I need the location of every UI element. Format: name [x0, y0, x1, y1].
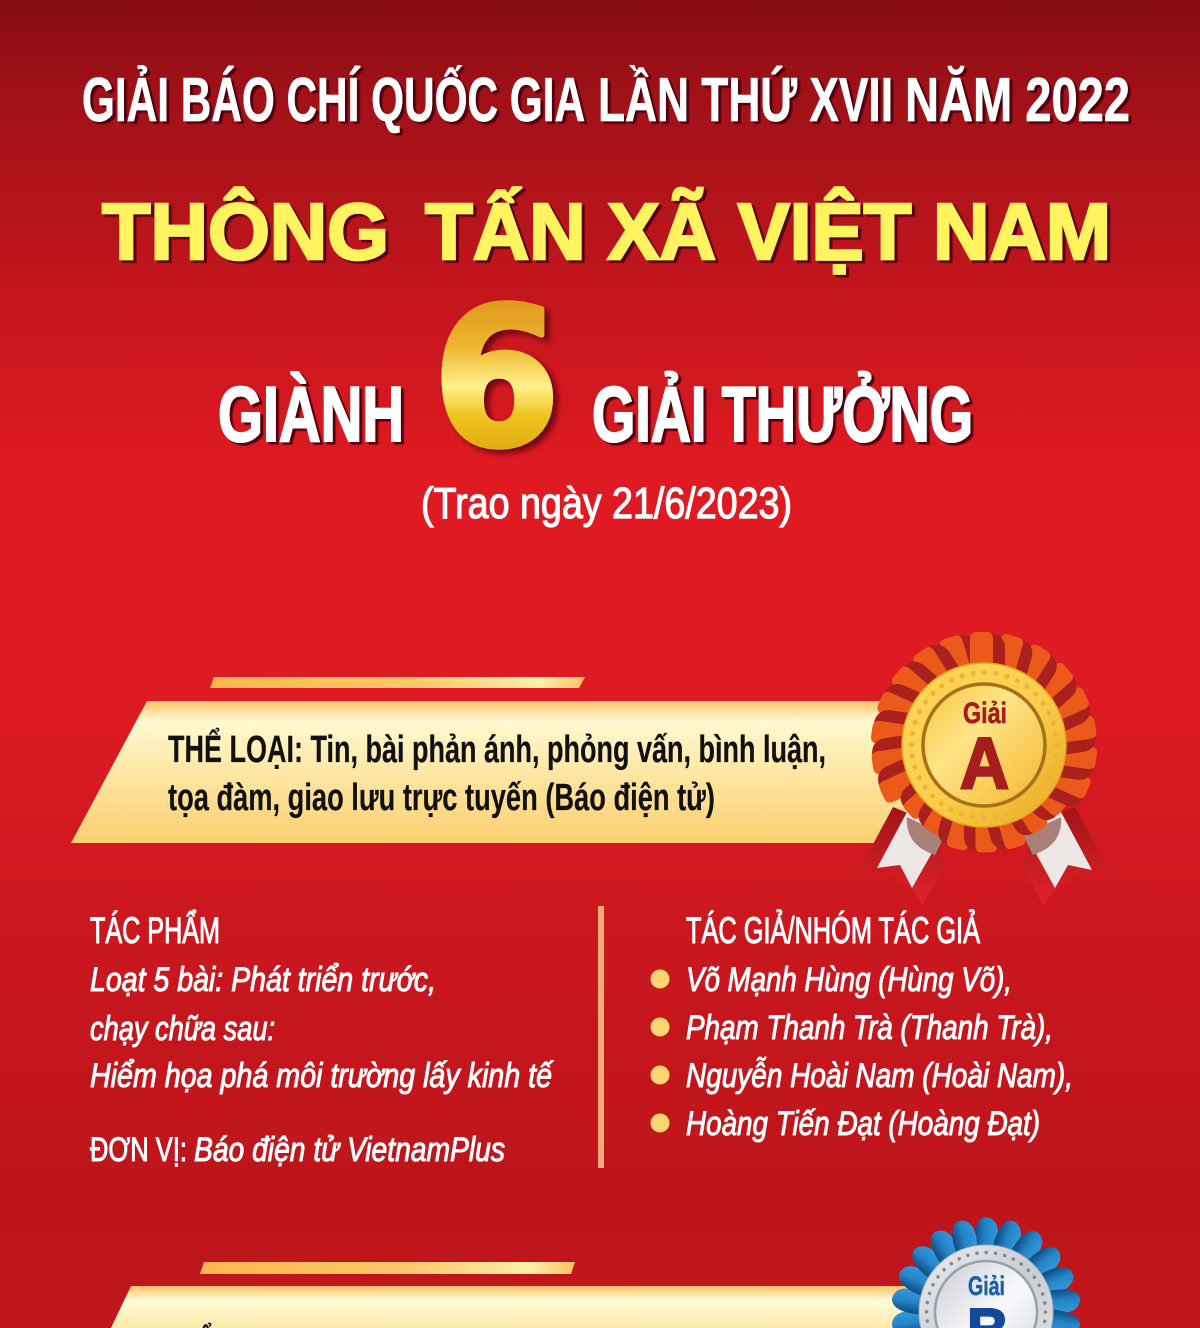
heading: organisation: THÔNG — [102, 187, 389, 276]
icon: silver medal B — [890, 1217, 1082, 1328]
accent bar A — [210, 677, 585, 688]
author list — [650, 961, 1073, 1143]
text block: work — [90, 909, 554, 1169]
panel: prize B — [111, 1217, 1082, 1328]
category text A: tọa đàm, giao lưu trực tuyến (Báo điện tử) — [168, 777, 715, 819]
text block: work: Loạt 5 bài: Phát triển trước, — [90, 961, 436, 999]
icon: silver medal B: Giải — [968, 1271, 1005, 1301]
title: award name: NĂM 2022 — [905, 66, 1130, 135]
text block: work: chạy chữa sau: — [90, 1010, 275, 1048]
icon: gold medal A: A — [960, 724, 1009, 804]
text block: work: TÁC PHẨM — [90, 909, 220, 951]
panel: prize A — [71, 631, 1110, 1169]
author list: Phạm Thanh Trà (Thanh Trà), — [686, 1009, 1053, 1047]
author list: Hoàng Tiến Đạt (Hoàng Đạt) — [686, 1105, 1040, 1143]
author list: Võ Mạnh Hùng (Hùng Võ), — [686, 961, 1012, 999]
heading: prizes: GIẢI THƯỞNG — [592, 370, 973, 458]
icon: gold medal A — [858, 631, 1110, 905]
category banner A — [71, 701, 910, 843]
text block: authors — [650, 910, 1073, 1143]
title: award name: LẦN THỨ XVII — [598, 66, 893, 135]
heading: wins: GIÀNH — [218, 370, 404, 458]
text block: work: Hiểm họa phá môi trường lấy kinh tế — [90, 1057, 554, 1095]
text block: work: Báo điện tử VietnamPlus — [194, 1131, 505, 1169]
big number 6: 6 — [433, 268, 560, 489]
icon: gold medal A: Giải — [963, 697, 1007, 730]
category banner B — [111, 1286, 930, 1328]
heading: organisation: TẤN XÃ VIỆT NAM — [425, 187, 1111, 276]
text block: work: ĐƠN VỊ: — [90, 1131, 187, 1169]
award date: (Trao ngày 21/6/2023) — [421, 479, 792, 528]
heading: organisation — [102, 187, 1111, 276]
text block: authors: TÁC GIẢ/NHÓM TÁC GIẢ — [686, 910, 980, 951]
accent bar B — [200, 1262, 575, 1274]
title: award name: GIẢI BÁO CHÍ QUỐC GIA — [82, 66, 585, 135]
author list: Nguyễn Hoài Nam (Hoài Nam), — [686, 1057, 1073, 1095]
category text A: THỂ LOẠI: Tin, bài phản ánh, phỏng vấn, bình luận, — [168, 726, 826, 771]
category text A — [168, 726, 826, 819]
